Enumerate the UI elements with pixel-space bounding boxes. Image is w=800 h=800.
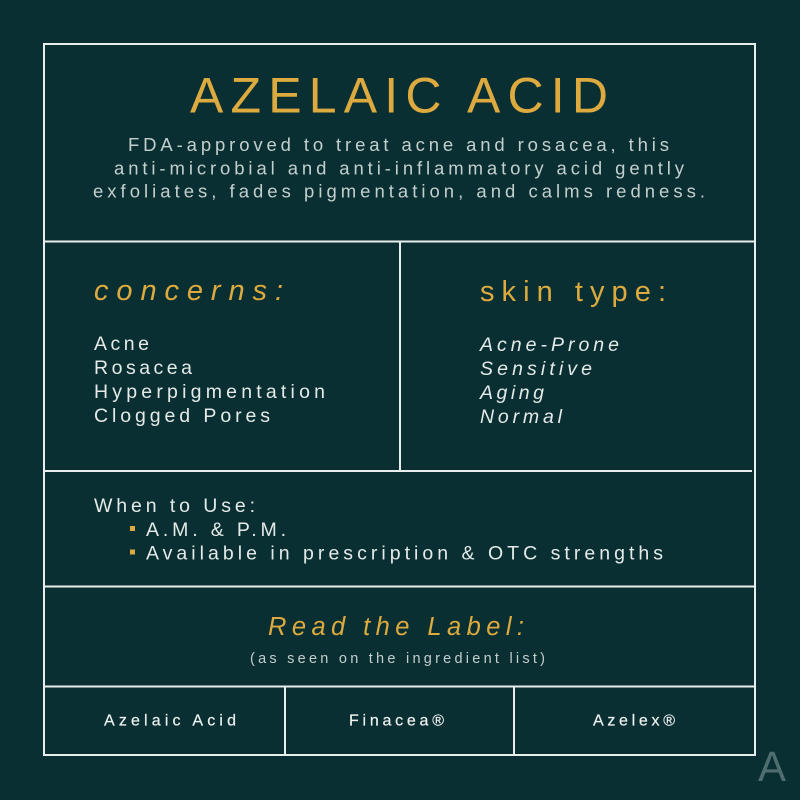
panel: when to use	[94, 495, 663, 564]
bullet: availability: Available in prescription & OTC strengths	[146, 542, 663, 564]
description text block	[93, 134, 705, 202]
list: concerns: Hyperpigmentation	[94, 381, 325, 403]
list: skin types	[479, 334, 619, 428]
heading: concerns: concerns:	[94, 275, 283, 307]
panel: concerns	[94, 275, 325, 427]
list: skin types: Normal	[480, 406, 563, 428]
subheading: ingredient list note: (as seen on the ingredient list)	[250, 651, 545, 667]
heading: read the label: Read the Label:	[268, 613, 524, 641]
panel: skin type	[479, 276, 666, 428]
title: AZELAIC ACID	[190, 68, 608, 124]
list: concerns: Clogged Pores	[94, 405, 270, 427]
list: concerns	[94, 333, 325, 427]
ingredient name: Azelex: Azelex®	[593, 712, 675, 730]
list: skin types: Acne-Prone	[479, 334, 619, 356]
heading: skin type: skin type:	[480, 276, 666, 308]
description text block: FDA-approved to treat acne and rosacea, this	[128, 134, 669, 155]
list: skin types: Aging	[479, 382, 544, 404]
ingredient name: Azelaic Acid: Azelaic Acid	[104, 712, 236, 730]
description text block: exfoliates, fades pigmentation, and calms redness.	[93, 180, 705, 202]
logo: watermark A: A	[758, 743, 786, 791]
list: concerns: Acne	[94, 333, 149, 355]
panel: read the label	[250, 613, 545, 667]
ingredient name: Finacea: Finacea®	[349, 712, 444, 730]
list: skin types: Sensitive	[480, 358, 592, 380]
description text block: anti-microbial and anti-inflammatory acid gently	[114, 158, 685, 178]
list: concerns: Rosacea	[94, 357, 192, 379]
bullet: A.M. and P.M.: A.M. & P.M.	[146, 519, 286, 541]
heading: when to use: When to Use:	[94, 495, 255, 517]
